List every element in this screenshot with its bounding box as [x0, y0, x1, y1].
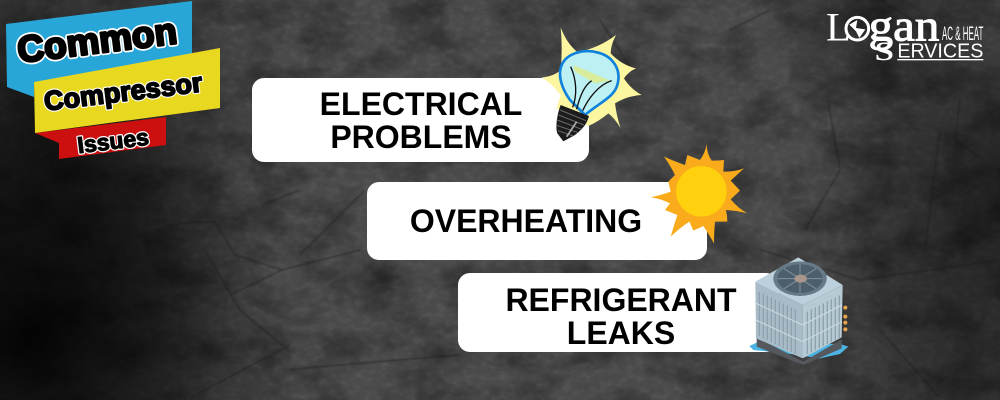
panel: electrical problems	[252, 78, 589, 162]
heading: Compressor: Compressor	[42, 67, 204, 117]
panel: refrigerant leaks	[458, 273, 778, 352]
logo text: ERVICES: ERVICES	[897, 40, 983, 62]
heading: Issues: Issues	[76, 124, 150, 158]
label: overheating: OVERHEATING	[410, 203, 642, 239]
heading: Common: Common	[15, 10, 179, 71]
heading: Issues: Issues	[76, 124, 150, 158]
label: electrical problems: PROBLEMS	[330, 119, 512, 155]
heading: Common: Common	[15, 10, 179, 71]
icon: sun	[651, 144, 747, 243]
water puddle	[749, 343, 848, 358]
label: refrigerant leaks: REFRIGERANT	[505, 282, 737, 318]
banner ribbon: blue	[6, 1, 192, 97]
icon: light bulb	[542, 27, 642, 141]
logo wordmark: L: L	[826, 5, 851, 50]
logo globe: o	[846, 17, 869, 40]
heading: Compressor: Compressor	[42, 67, 204, 117]
logo: Logan AC & Heat Services	[826, 2, 983, 66]
banner ribbon: red	[35, 117, 166, 159]
label: refrigerant leaks: LEAKS	[567, 315, 675, 351]
title banner: Common Compressor Issues	[6, 1, 220, 159]
panel: overheating	[367, 182, 707, 260]
logo wordmark: gan: gan	[869, 2, 939, 51]
logo text: S tail of g: S	[875, 37, 894, 66]
icon: air conditioner unit	[749, 257, 848, 365]
banner ribbon: yellow	[34, 48, 220, 133]
label: electrical problems: ELECTRICAL	[320, 86, 522, 122]
